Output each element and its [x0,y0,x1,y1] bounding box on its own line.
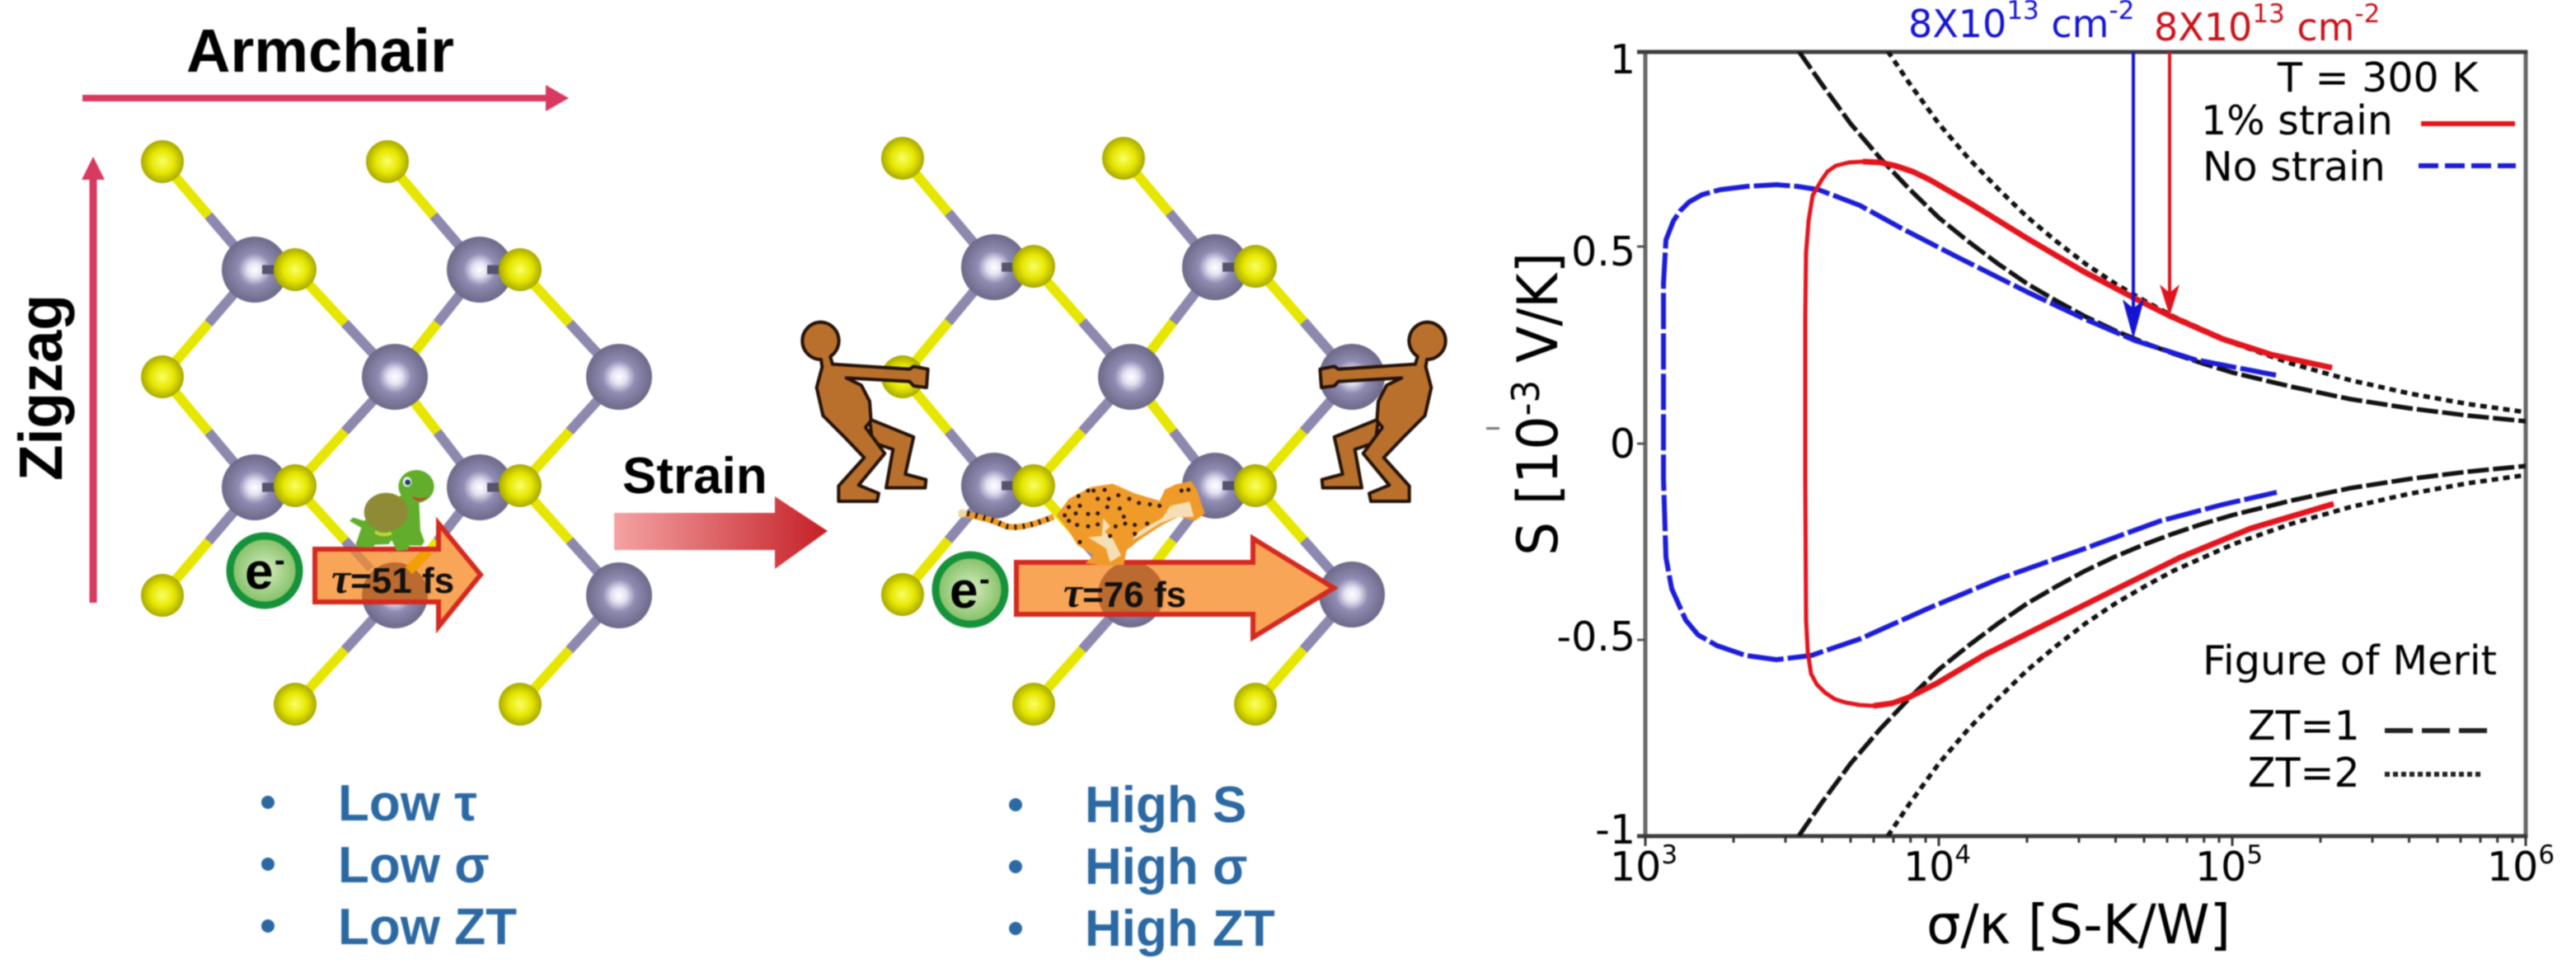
y tick labels: -0.5 [1556,613,1635,660]
label: Strain: Strain [622,448,767,505]
curves: figure of merit and strain data [1663,51,2527,836]
x tick labels: 10 [1903,844,1954,891]
strained bonds yellow [903,158,1304,704]
curve: ZT=2 upper [1888,51,2527,412]
lattice bonds grey [209,216,619,650]
legend: figure of merit [2203,637,2497,797]
x tick labels: 6 [2538,840,2555,870]
curve: ZT=2 lower [1888,475,2527,836]
y tick labels: 0.5 [1571,228,1635,275]
list: strained properties: High σ [1085,839,1247,895]
curve: 1% strain thick ends [1863,162,2334,706]
label: red carrier density: cm [2285,5,2354,49]
arrow: scattering time 76 fs: τ=76 fs [1063,570,1186,617]
list: unstrained properties: Low σ [338,837,490,894]
label: blue carrier density: cm [2039,2,2109,46]
y axis title: S [10 [1506,409,1571,556]
icon: electron right [936,555,1005,624]
curve: ZT=1 lower [1799,466,2527,836]
legend: figure of merit: Figure of Merit [2203,637,2497,684]
arrow: scattering time 51 fs [315,524,481,628]
icon: cheetah [958,481,1205,566]
arrow: strain [614,496,828,569]
list: unstrained properties: Low τ [338,775,477,832]
legend: strain: No strain [2203,143,2386,190]
legend: strain: T = 300 K [2277,54,2480,101]
x tick labels: 4 [1954,840,1971,870]
heading: Zigzag: Zigzag [7,294,75,481]
arrow: scattering time 76 fs [1016,538,1334,637]
icon: turtle [350,470,434,551]
hidden bond stubs [262,270,509,487]
curve: no strain [1663,185,2277,660]
strained bond stubs [1002,267,1243,486]
stray axis mark [1486,427,1499,430]
y axis title: -3 [1504,380,1548,416]
curve: 1% strain [1805,162,2334,706]
arrow: 1% strain carrier density [2160,52,2180,316]
icon: electron right: - [979,562,990,597]
list: strained properties: High S [1085,777,1246,834]
icon: electron left: e [245,543,273,600]
list: unstrained properties [261,775,517,956]
grey atoms [222,237,652,628]
legend: strain [2201,54,2516,190]
arrow: scattering time 51 fs: τ=51 fs [331,556,454,603]
label: red carrier density: -2 [2354,0,2380,29]
panel: unstrained lattice [141,140,652,726]
plot frame [1637,52,2527,846]
list: strained properties: High ZT [1085,900,1275,957]
x tick labels: 5 [2246,840,2263,870]
y axis title: V/K] [1506,252,1571,380]
lattice bonds yellow [162,162,570,704]
y tick labels [1556,36,1635,853]
y tick labels: 1 [1610,36,1635,83]
icon: person pulling right [1320,322,1446,501]
curve: ZT=1 upper [1799,51,2527,421]
x tick labels: 10 [1610,844,1661,891]
legend: figure of merit: ZT=1 [2248,703,2360,750]
y tick labels: 0 [1610,421,1635,468]
icon: electron left: - [274,543,285,578]
arrow: no strain carrier density [2123,52,2144,339]
strained yellow atoms [881,137,1277,726]
x axis title: σ/κ [S-K/W] [1926,893,2231,957]
arrow: armchair direction [82,85,569,111]
x tick labels [1610,840,2555,891]
label: red carrier density: 13 [2252,0,2285,29]
list: strained properties [1009,777,1275,957]
arrow: zigzag direction [82,157,105,603]
panel: strained lattice [881,137,1385,726]
x tick labels: 10 [2487,844,2538,891]
icon: person pulling left [802,322,928,501]
legend: figure of merit: ZT=2 [2248,750,2360,797]
y tick labels: -1 [1595,806,1635,853]
strained bonds grey [948,213,1352,650]
label: blue carrier density: 8X10 [1908,2,2006,46]
chart: Seebeck coefficient vs sigma/kappa [1486,0,2555,957]
list: unstrained properties: Low ZT [338,899,517,956]
heading: Armchair: Armchair [186,16,454,85]
icon: electron left [230,536,299,605]
x tick labels: 10 [2195,844,2246,891]
yellow atoms [141,140,542,726]
legend: strain: 1% strain [2201,97,2393,144]
label: red carrier density: 8X10 [2154,5,2252,49]
x tick labels: 3 [1661,840,1677,870]
icon: electron right: e [950,562,978,619]
strained grey atoms [961,234,1385,628]
